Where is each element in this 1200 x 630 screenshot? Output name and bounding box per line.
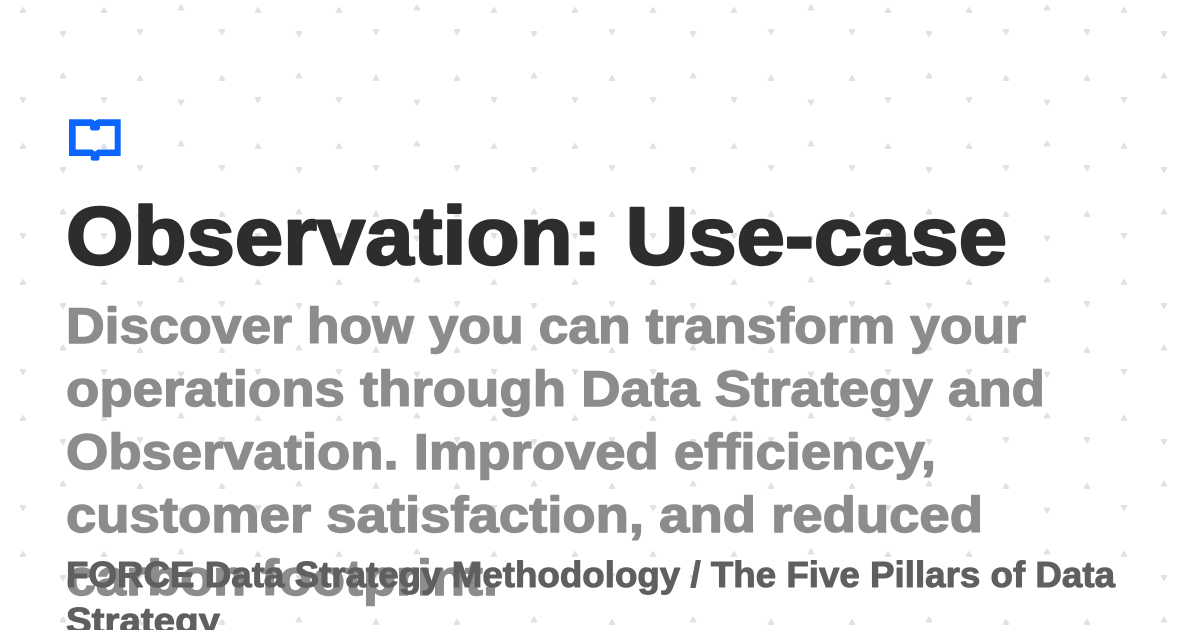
title: Observation: Use-case xyxy=(66,191,1007,282)
subtitle text block xyxy=(66,298,1045,606)
subtitle text block: Observation. Improved efficiency, xyxy=(66,424,936,480)
subtitle text block: operations through Data Strategy and xyxy=(66,361,1045,417)
footer: methodology label: FORCE Data Strategy Methodology / The Five Pillars of Data xyxy=(66,554,1116,595)
icon: open book logo xyxy=(69,119,121,161)
footer: methodology label xyxy=(66,554,1116,630)
subtitle text block: Discover how you can transform your xyxy=(66,298,1026,354)
subtitle text block: customer satisfaction, and reduced xyxy=(66,487,983,543)
subtitle text block: carbon footprint. xyxy=(66,550,498,606)
